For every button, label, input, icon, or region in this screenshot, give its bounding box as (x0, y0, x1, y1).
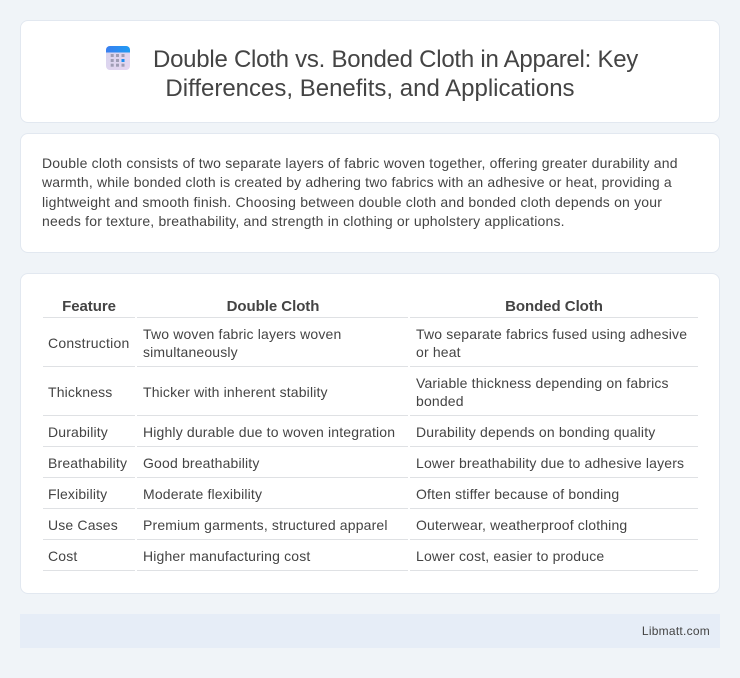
row: construction: or heat (416, 344, 461, 360)
icon: calendar (106, 46, 130, 70)
title card (20, 20, 720, 123)
title: Differences, Benefits, and Applications (165, 75, 575, 102)
footer (20, 614, 720, 648)
row: cost: Higher manufacturing cost (143, 548, 310, 564)
row: flexibility: Flexibility (48, 486, 107, 502)
row: flexibility: Moderate flexibility (143, 486, 262, 502)
row: durability: Highly durable due to woven integration (143, 424, 395, 440)
row: durability: Durability (48, 424, 108, 440)
row: durability: Durability depends on bonding quality (416, 424, 655, 440)
row: flexibility (48, 486, 619, 502)
intro text (42, 154, 678, 229)
row: durability (48, 424, 656, 440)
row: use cases: Outerwear, weatherproof clothing (416, 517, 627, 533)
row: thickness: Variable thickness depending on fabrics (416, 375, 669, 391)
row: construction: Construction (48, 335, 130, 351)
table header: Bonded Cloth (505, 298, 603, 315)
row: cost (48, 548, 604, 564)
title: Double Cloth vs. Bonded Cloth in Apparel: Key (153, 46, 638, 73)
row: thickness: Thickness (48, 384, 112, 400)
row: flexibility: Often stiffer because of bonding (416, 486, 619, 502)
table header: Feature (62, 298, 116, 315)
row: thickness (48, 375, 669, 409)
row: breathability (48, 455, 684, 471)
footer credit: Libmatt.com (642, 624, 710, 638)
row: construction: Two woven fabric layers woven (143, 326, 341, 342)
intro text: lightweight and smooth finish. Choosing between double cloth and bonded cloth depends on your (42, 194, 662, 210)
row: breathability: Good breathability (143, 455, 260, 471)
table header: Double Cloth (227, 298, 319, 315)
intro card (20, 133, 720, 253)
row: construction: simultaneously (143, 344, 238, 360)
intro text: warmth, while bonded cloth is created by adhering two fabrics with an adhesive or heat, providing a (42, 174, 672, 190)
intro text: Double cloth consists of two separate layers of fabric woven together, offering greater durability and (42, 154, 678, 170)
title (153, 46, 638, 102)
row: construction: Two separate fabrics fused using adhesive (416, 326, 687, 342)
row: use cases: Premium garments, structured apparel (143, 517, 388, 533)
row: use cases (48, 517, 627, 533)
row: thickness: bonded (416, 393, 464, 409)
row: cost: Cost (48, 548, 77, 564)
row: breathability: Lower breathability due to adhesive layers (416, 455, 684, 471)
table header (62, 298, 603, 315)
row: thickness: Thicker with inherent stability (143, 384, 328, 400)
intro text: needs for texture, breathability, and strength in clothing or upholstery applications. (42, 213, 565, 229)
row: breathability: Breathability (48, 455, 127, 471)
row: use cases: Use Cases (48, 517, 118, 533)
row: construction (48, 326, 687, 360)
comparison table card (20, 273, 720, 594)
row: cost: Lower cost, easier to produce (416, 548, 604, 564)
